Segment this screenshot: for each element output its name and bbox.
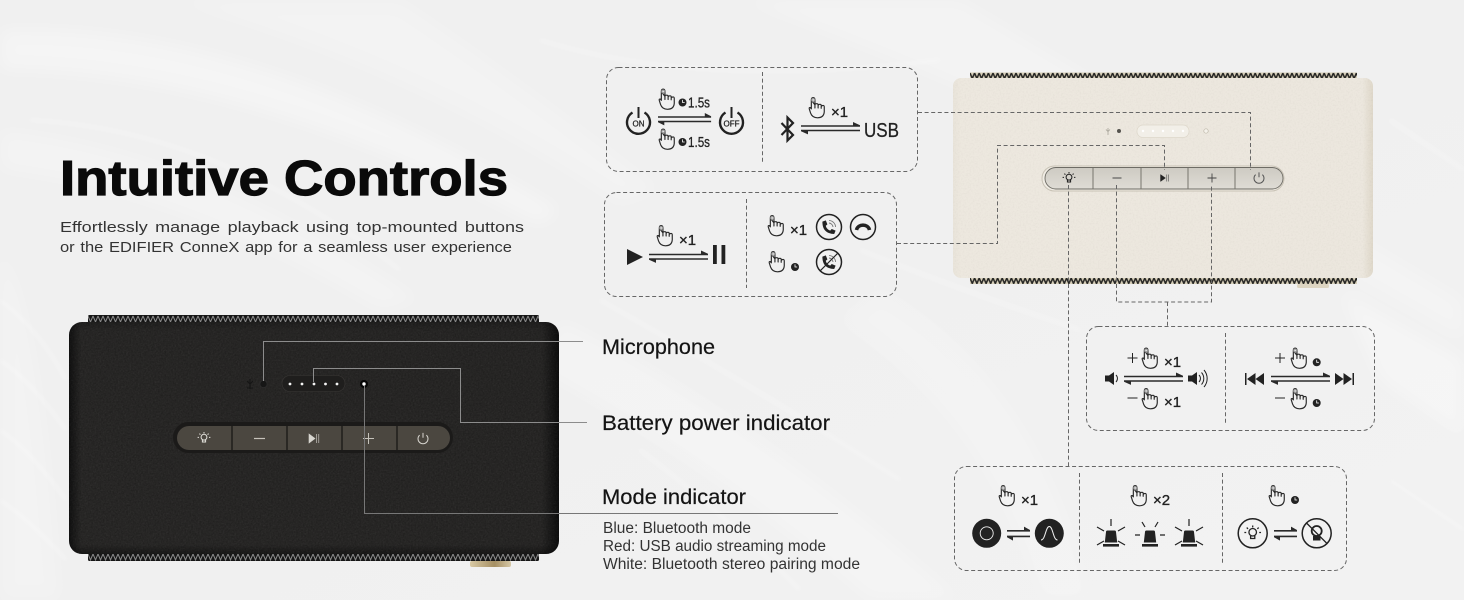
panel: playback and calls <box>604 192 896 296</box>
title: Intuitive Controls <box>60 152 508 206</box>
indicators <box>1106 125 1208 138</box>
label: microphone: Microphone <box>602 335 715 359</box>
button bar <box>173 422 453 453</box>
call controls: ×1 <box>790 222 807 239</box>
power on/off switching: OFF <box>724 120 740 128</box>
black speaker, top view <box>69 315 559 567</box>
mode indicator details: White: Bluetooth stereo pairing mode <box>603 556 860 573</box>
mode indicator details: Red: USB audio streaming mode <box>603 538 826 555</box>
top grille <box>88 315 539 324</box>
play and pause <box>627 226 725 265</box>
power on/off switching: 1.5s <box>688 135 710 151</box>
top grille <box>970 72 1357 79</box>
label: battery power indicator: Battery power indicator <box>602 411 830 435</box>
sound mode switching: ×1 <box>1021 492 1038 509</box>
call controls <box>768 214 876 274</box>
description: or the EDIFIER ConneX app for a seamless user experience <box>60 239 512 256</box>
description: Effortlessly manage playback using top-mounted buttons <box>60 219 524 236</box>
lamp on and off <box>1238 486 1331 548</box>
dashed connector: panel one to power button <box>918 112 1250 170</box>
bluetooth and USB switching: ×1 <box>831 104 848 121</box>
panel: power and source <box>606 68 918 172</box>
track control <box>1245 348 1354 409</box>
brass foot <box>470 561 511 567</box>
power on/off switching: ON <box>632 120 645 128</box>
siren light modes <box>1097 486 1203 547</box>
speaker body <box>69 322 559 554</box>
volume control <box>1105 348 1207 411</box>
indicators: microphone, battery, mode <box>247 376 368 392</box>
siren light modes: ×2 <box>1153 492 1170 509</box>
dashed connector: lamp button to panel four <box>1068 185 1070 466</box>
volume control: ×1 <box>1164 354 1181 371</box>
description <box>60 219 524 256</box>
mode indicator details: Blue: Bluetooth mode <box>603 520 751 537</box>
dashed connector: panel two to play button <box>897 146 1164 244</box>
button bar <box>1042 166 1284 191</box>
dashed connector: volume buttons to panel three <box>1116 185 1212 326</box>
brass foot <box>1297 284 1329 288</box>
callout lines <box>264 342 838 514</box>
label: mode indicator: Mode indicator <box>602 485 746 509</box>
bluetooth and USB switching: USB <box>864 120 899 142</box>
sound mode switching <box>972 486 1064 548</box>
panel: EQ, siren and lamp modes <box>954 466 1346 570</box>
bluetooth and USB switching <box>782 98 899 142</box>
volume control: ×1 <box>1164 394 1181 411</box>
speaker body <box>953 78 1373 278</box>
bottom grille <box>88 553 539 561</box>
panel: volume and track <box>1086 326 1374 430</box>
power on/off switching <box>627 89 743 151</box>
bottom grille <box>970 278 1357 284</box>
play and pause: ×1 <box>679 232 696 249</box>
mode indicator details <box>603 520 860 573</box>
power on/off switching: 1.5s <box>688 96 710 112</box>
cream speaker, top view <box>953 72 1373 288</box>
